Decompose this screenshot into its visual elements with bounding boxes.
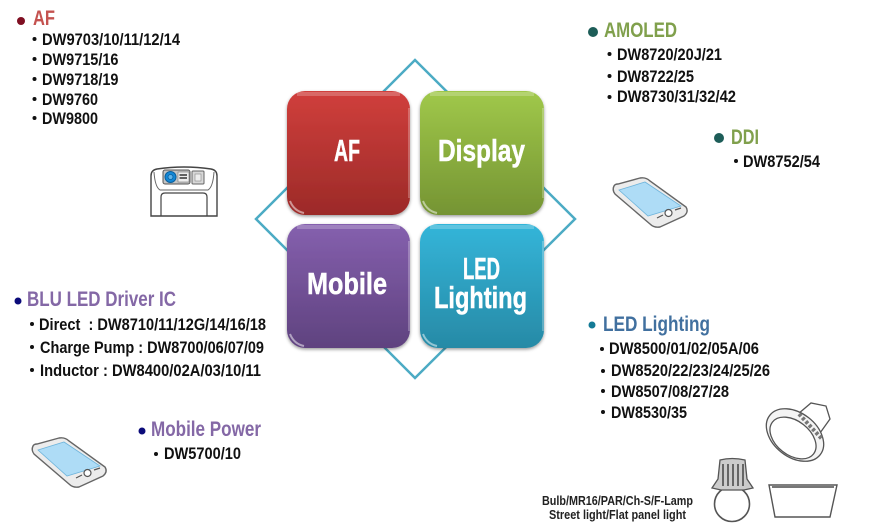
text block: AF: DW9715/16 bbox=[42, 51, 118, 69]
text block: AF: DW9760 bbox=[42, 91, 98, 109]
tile: Display: Display bbox=[438, 133, 526, 168]
text block: LED Lighting: DW8500/01/02/05A/06 bbox=[609, 340, 759, 358]
text block: Mobile Power bbox=[138, 418, 261, 463]
text block: BLU LED Driver IC: Inductor : DW8400/02A/03/10/11 bbox=[40, 362, 261, 380]
text block: AF: DW9718/19 bbox=[42, 71, 118, 89]
tile: Display bbox=[420, 91, 544, 215]
tile: Mobile bbox=[287, 224, 410, 348]
text block: Mobile Power: DW5700/10 bbox=[164, 445, 241, 463]
icon: camera module bbox=[151, 167, 217, 216]
text block: AMOLED: DW8730/31/32/42 bbox=[617, 88, 736, 106]
text block: LED Lighting: DW8520/22/23/24/25/26 bbox=[611, 362, 770, 380]
text block: LED Lighting bbox=[588, 313, 770, 422]
tile: LED Lighting: LED bbox=[463, 251, 500, 286]
text block: BLU LED Driver IC bbox=[14, 288, 266, 380]
text block: AMOLED bbox=[588, 19, 736, 106]
text block: AMOLED: DW8722/25 bbox=[617, 68, 694, 86]
text block: AF bbox=[17, 7, 181, 128]
text block: DDI bbox=[714, 126, 821, 171]
icon: smartphone (display) bbox=[613, 178, 687, 227]
text block: AMOLED: AMOLED bbox=[604, 19, 677, 42]
text block: DDI: DDI bbox=[731, 126, 759, 149]
icon: flat panel light bbox=[769, 485, 837, 517]
caption: lamp types bbox=[542, 493, 693, 522]
icon: PAR lamp bbox=[756, 398, 834, 472]
text block: LED Lighting: DW8507/08/27/28 bbox=[611, 383, 729, 401]
tile: AF: AF bbox=[334, 133, 360, 168]
text block: LED Lighting: LED Lighting bbox=[603, 313, 710, 336]
tile: AF bbox=[287, 91, 410, 215]
tile: LED Lighting: Lighting bbox=[434, 280, 527, 315]
caption: lamp types: Street light/Flat panel light bbox=[549, 507, 687, 522]
icon: smartphone (mobile) bbox=[32, 438, 106, 487]
text block: AF: DW9703/10/11/12/14 bbox=[42, 31, 181, 49]
text block: DDI: DW8752/54 bbox=[743, 153, 821, 171]
central diagram bbox=[256, 60, 575, 378]
text block: BLU LED Driver IC: Direct : DW8710/11/12G/14/16/18 bbox=[39, 316, 266, 334]
text block: BLU LED Driver IC: Charge Pump : DW8700/06/07/09 bbox=[40, 339, 264, 357]
text block: AF: AF bbox=[33, 7, 55, 30]
tile: Mobile: Mobile bbox=[307, 266, 387, 301]
diamond outline bbox=[256, 60, 575, 378]
text block: AF: DW9800 bbox=[42, 110, 98, 128]
text block: BLU LED Driver IC: BLU LED Driver IC bbox=[27, 288, 176, 311]
icon: LED bulb bbox=[712, 458, 753, 522]
tile: LED Lighting bbox=[420, 224, 544, 348]
text block: AMOLED: DW8720/20J/21 bbox=[617, 46, 722, 64]
text block: LED Lighting: DW8530/35 bbox=[611, 404, 687, 422]
text block: Mobile Power: Mobile Power bbox=[151, 418, 261, 441]
caption: lamp types: Bulb/MR16/PAR/Ch-S/F-Lamp bbox=[542, 493, 693, 508]
